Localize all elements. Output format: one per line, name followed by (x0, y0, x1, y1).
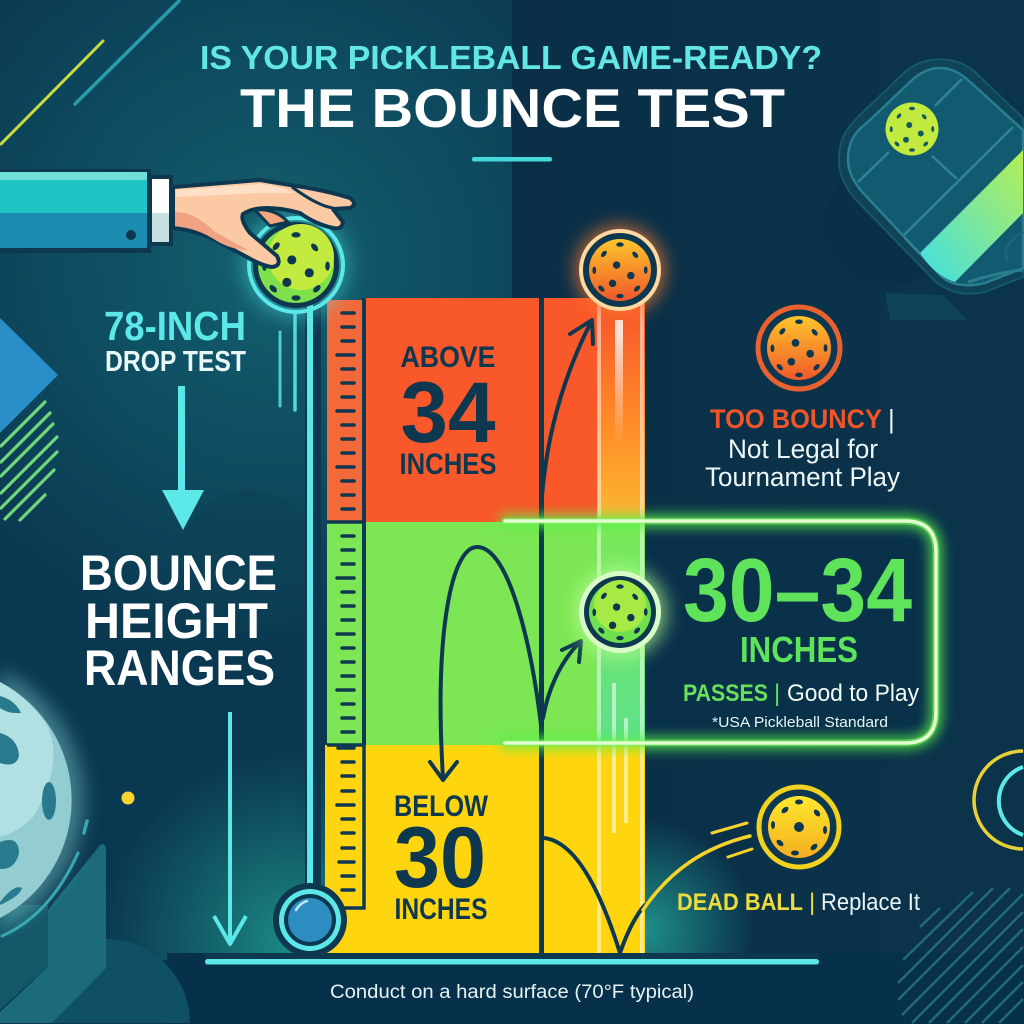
verdict: PASSES (683, 680, 768, 707)
zone label: above 34 inches: 34 (400, 365, 496, 461)
unit: INCHES (740, 629, 858, 670)
hand (173, 180, 354, 267)
bar chart: bounce height zones (325, 298, 645, 955)
ball glow (242, 211, 350, 319)
text: too bouncy (705, 404, 900, 492)
text: dead ball: DEAD BALL (677, 889, 803, 916)
ruler (325, 298, 364, 908)
text: too bouncy: TOO BOUNCY (710, 404, 882, 434)
arrow: down from drop test (162, 386, 204, 530)
label: 78-inch drop test (104, 303, 246, 378)
text: too bouncy: | (888, 404, 895, 434)
low bounce arc (544, 838, 620, 953)
text: dead ball (677, 889, 920, 916)
verdict (683, 680, 919, 707)
verdict: | (774, 680, 780, 707)
icon: top orange ball (576, 226, 664, 314)
bounce trajectories (430, 320, 645, 953)
zone: 30 to 34 inches (366, 522, 645, 745)
zone label: below 30 inches: INCHES (394, 893, 488, 926)
main heading: THE BOUNCE TEST (240, 77, 785, 139)
arrow to green ball (543, 642, 580, 718)
main bounce arc (441, 547, 541, 778)
icon: too bouncy ball (758, 307, 840, 389)
text: too bouncy: Not Legal for (728, 434, 878, 464)
zone label: below 30 inches: BELOW (394, 790, 489, 823)
heading: bounce height ranges: RANGES (84, 640, 275, 696)
zone label: above 34 inches: ABOVE (400, 341, 496, 374)
decorative yellow dot (122, 792, 134, 804)
decorative blue diamond (0, 318, 58, 433)
text: dead ball: Replace It (821, 889, 920, 916)
floor line (205, 953, 819, 964)
neon border (505, 521, 936, 743)
text: too bouncy: Tournament Play (705, 462, 900, 492)
decorative paddle with court lines (823, 59, 1023, 320)
icon: green ball (253, 222, 339, 308)
icon: hand dropping ball (0, 169, 354, 319)
title (200, 39, 822, 162)
verdict: Good to Play (787, 680, 919, 707)
footer note: Conduct on a hard surface (70°F typical) (330, 982, 694, 1003)
centre divider (539, 298, 544, 955)
title underline (472, 157, 552, 162)
label: 78-inch drop test: 78-INCH (104, 303, 246, 349)
heading: bounce height ranges (80, 545, 277, 696)
decorative large pickleball (0, 670, 190, 1023)
panel: passes callout (505, 521, 936, 743)
heading: bounce height ranges: HEIGHT (85, 593, 268, 649)
decorative green hatch (1, 402, 57, 520)
zone: above 34 inches (366, 298, 645, 522)
light beams (597, 300, 644, 955)
icon: green ball (574, 566, 666, 658)
label: 78-inch drop test: DROP TEST (105, 346, 246, 378)
subtitle: IS YOUR PICKLEBALL GAME-READY? (200, 39, 822, 76)
arrow: down to floor (214, 712, 246, 944)
arrow head down (430, 762, 457, 780)
zone: below 30 inches (325, 745, 645, 955)
arrow to top ball (541, 324, 590, 510)
heading: bounce height ranges: BOUNCE (80, 545, 277, 601)
icon: dead ball (759, 787, 839, 867)
zone label: below 30 inches: 30 (394, 810, 486, 906)
ball ring (249, 218, 343, 312)
zone label: above 34 inches (400, 341, 496, 481)
left guide lines (280, 312, 295, 410)
zone label: above 34 inches: INCHES (400, 448, 496, 481)
range value: 30–34 (683, 541, 912, 641)
decorative rings right (974, 751, 1023, 849)
sleeve (0, 169, 173, 253)
panel fill (645, 524, 935, 741)
text: dead ball: | (809, 889, 815, 916)
decorative lines top left (1, 1, 179, 144)
standard note: *USA Pickleball Standard (712, 715, 888, 731)
hand shading (175, 212, 248, 250)
dead ball trajectory (643, 823, 752, 910)
thermometer stem and bulb (273, 300, 347, 957)
curled finger (255, 210, 288, 226)
decorative hatch bottom right (898, 888, 1023, 1023)
